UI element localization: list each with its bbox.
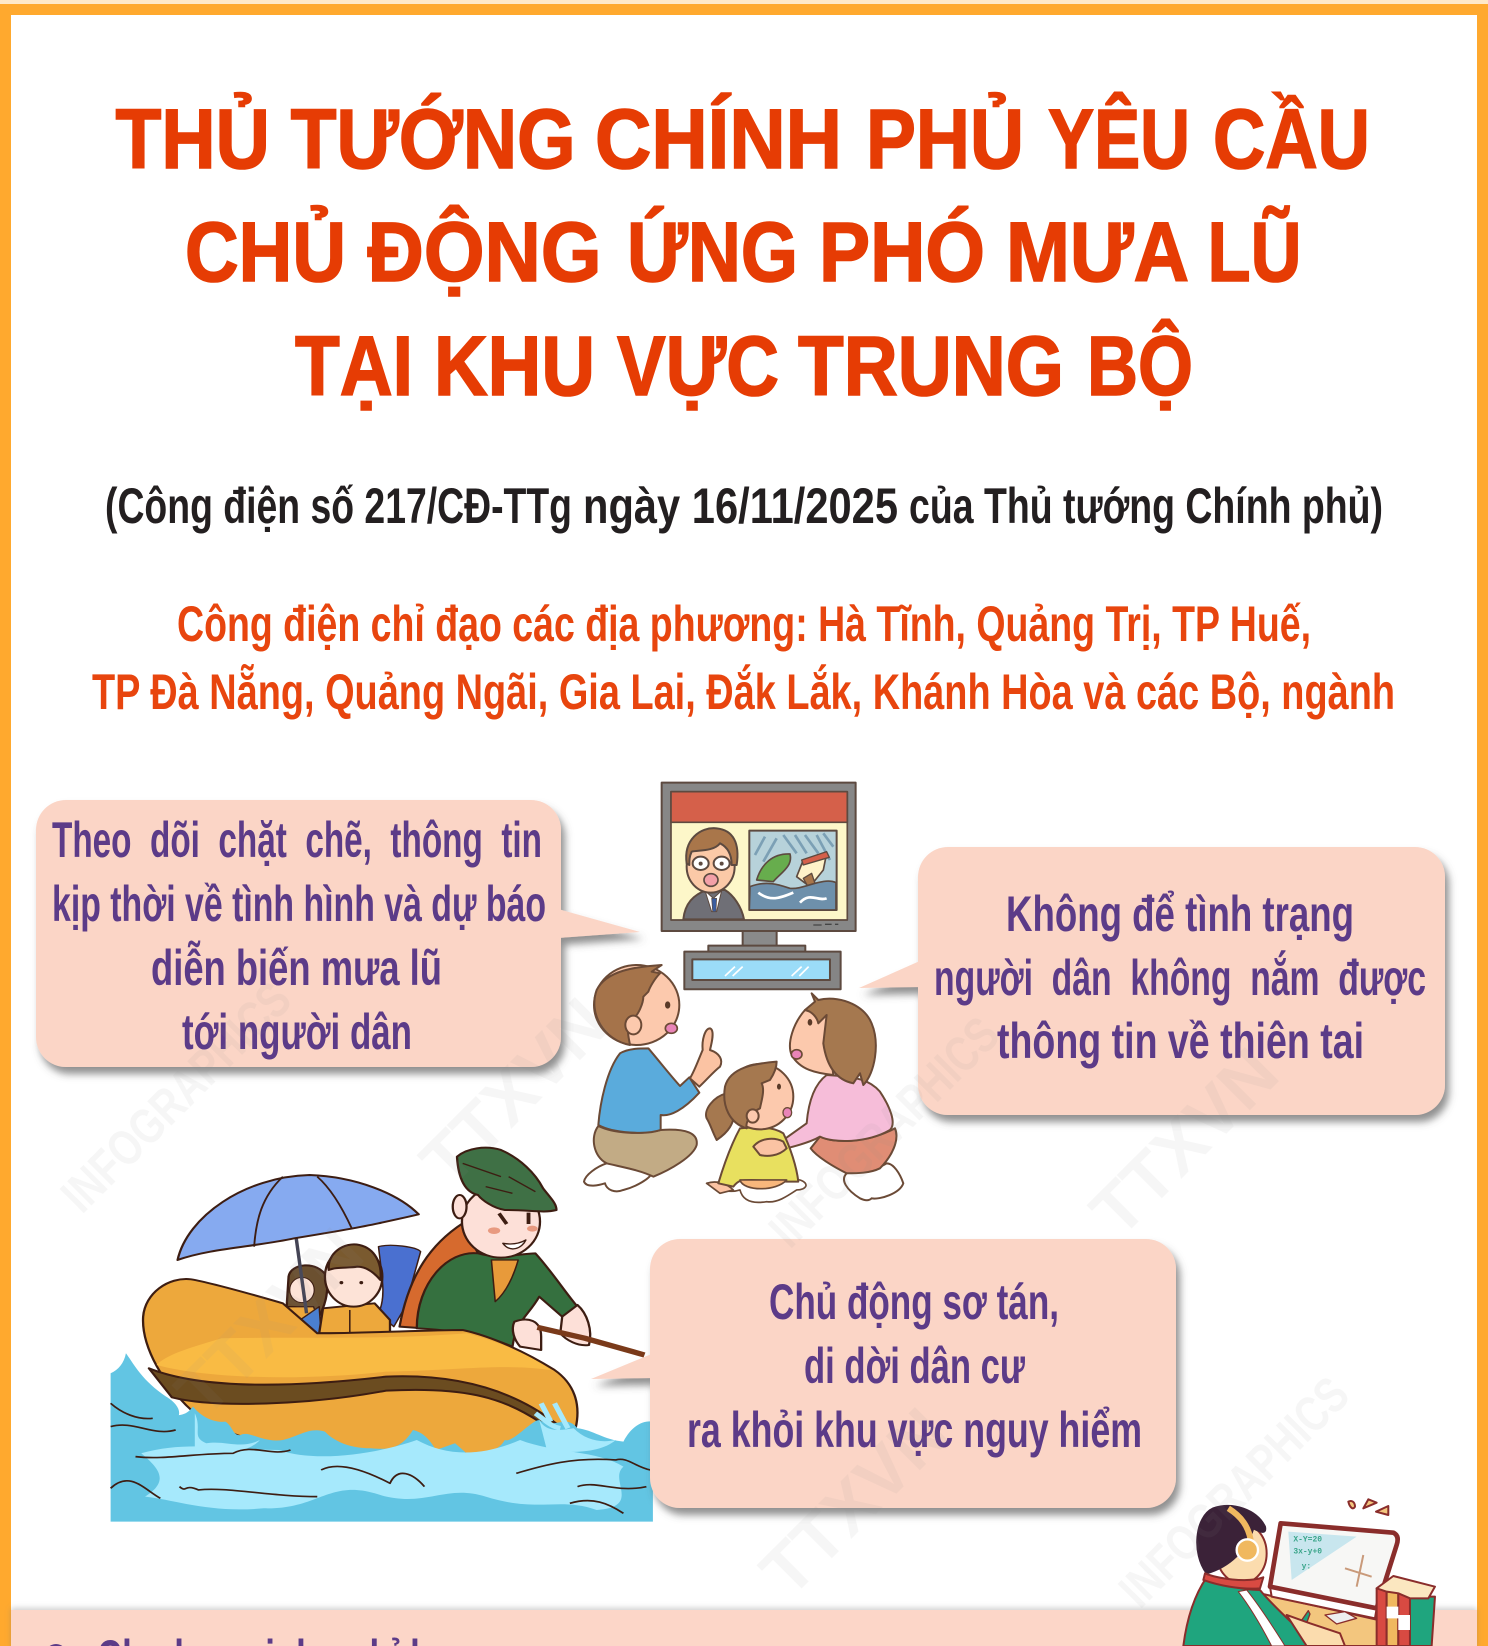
title: ỨNG: [627, 205, 798, 299]
illustration: rescue boat on flood water: [111, 1148, 653, 1522]
title: YÊU: [1048, 92, 1190, 186]
callout 1: keep people informed: [36, 800, 640, 1067]
title: THỦ TƯỚNG: [116, 92, 576, 186]
mother: [783, 993, 903, 1200]
watermarks: TTXVN: [1075, 1033, 1293, 1251]
title: TRUNG: [798, 319, 1064, 413]
subtitle: document reference: (Công điện số 217/CĐ-TTg: [105, 478, 572, 534]
callout 1: keep people informed: Theo dõi chặt chẽ, thông tin: [52, 812, 542, 868]
title: ĐỘNG: [368, 205, 602, 299]
computer: 3x-y+0: [1293, 1547, 1322, 1556]
callout 3: proactive evacuation: Chủ động sơ tán,: [769, 1274, 1059, 1330]
title: PHỦ: [866, 92, 1024, 186]
bottom panel: school closure: [11, 1610, 1477, 1646]
watermarks: TTXVN: [405, 983, 623, 1201]
computer: [1270, 1523, 1398, 1624]
title: VỰC: [617, 319, 779, 413]
title: CHỦ: [185, 205, 346, 299]
callout 3: proactive evacuation: di dời dân cư: [804, 1338, 1026, 1394]
watermarks: [50, 971, 1360, 1618]
title: [116, 92, 1370, 413]
watermarks: INFOGRAPHICS: [50, 971, 302, 1223]
title: LŨ: [1208, 205, 1302, 299]
callout 1: keep people informed: tới người dân: [182, 1004, 412, 1060]
flood water foreground: [111, 1402, 653, 1522]
title: MƯA: [1006, 205, 1189, 299]
title: BỘ: [1087, 319, 1193, 413]
book stack: [1377, 1576, 1435, 1646]
inflatable boat hull: [143, 1279, 577, 1455]
watermarks: TTXVN: [160, 1213, 378, 1431]
doodle marks: [1348, 1499, 1388, 1515]
callout 3: proactive evacuation: ra khỏi khu vực nguy hiểm: [687, 1402, 1142, 1458]
title: CHÍNH: [595, 92, 842, 186]
umbrella: [178, 1175, 419, 1313]
callout 1: keep people informed: diễn biến mưa lũ: [151, 940, 442, 996]
desk: [1260, 1593, 1400, 1646]
title: PHÓ: [819, 205, 985, 299]
recipients text: [92, 596, 1395, 720]
watermarks: INFOGRAPHICS: [1108, 1366, 1360, 1618]
boy passenger: [319, 1244, 390, 1333]
callout 1: keep people informed: kịp thời về tình hình và dự báo: [52, 876, 546, 932]
callout 2: no uninformed residents: thông tin về thiên tai: [997, 1013, 1364, 1069]
watermarks: INFOGRAPHICS: [758, 1006, 1010, 1258]
callout 2: no uninformed residents: Không để tình trạng: [1006, 886, 1354, 942]
illustration: student at computer: [1183, 1499, 1435, 1646]
child: [706, 1062, 806, 1202]
father: [584, 965, 721, 1191]
callout 3: proactive evacuation: [591, 1239, 1176, 1508]
splash behind boat: [111, 1353, 179, 1420]
callout 2: no uninformed residents: [859, 847, 1445, 1115]
girl passenger: [256, 1265, 327, 1333]
subtitle: document reference: ngày 16/11/2025: [583, 478, 898, 534]
subtitle: document reference: [105, 478, 1383, 534]
illustration: television news: [662, 783, 856, 989]
title: CẦU: [1213, 92, 1370, 186]
computer: y:: [1302, 1562, 1311, 1571]
soldier body: [379, 1148, 590, 1350]
oar: [537, 1327, 644, 1355]
person: [1183, 1506, 1345, 1646]
illustration: family watching television: [584, 965, 903, 1202]
title: KHU: [434, 319, 595, 413]
title: TẠI: [295, 319, 413, 413]
watermarks: TTXVN: [745, 1393, 963, 1611]
computer: X-Y=20: [1293, 1536, 1322, 1545]
